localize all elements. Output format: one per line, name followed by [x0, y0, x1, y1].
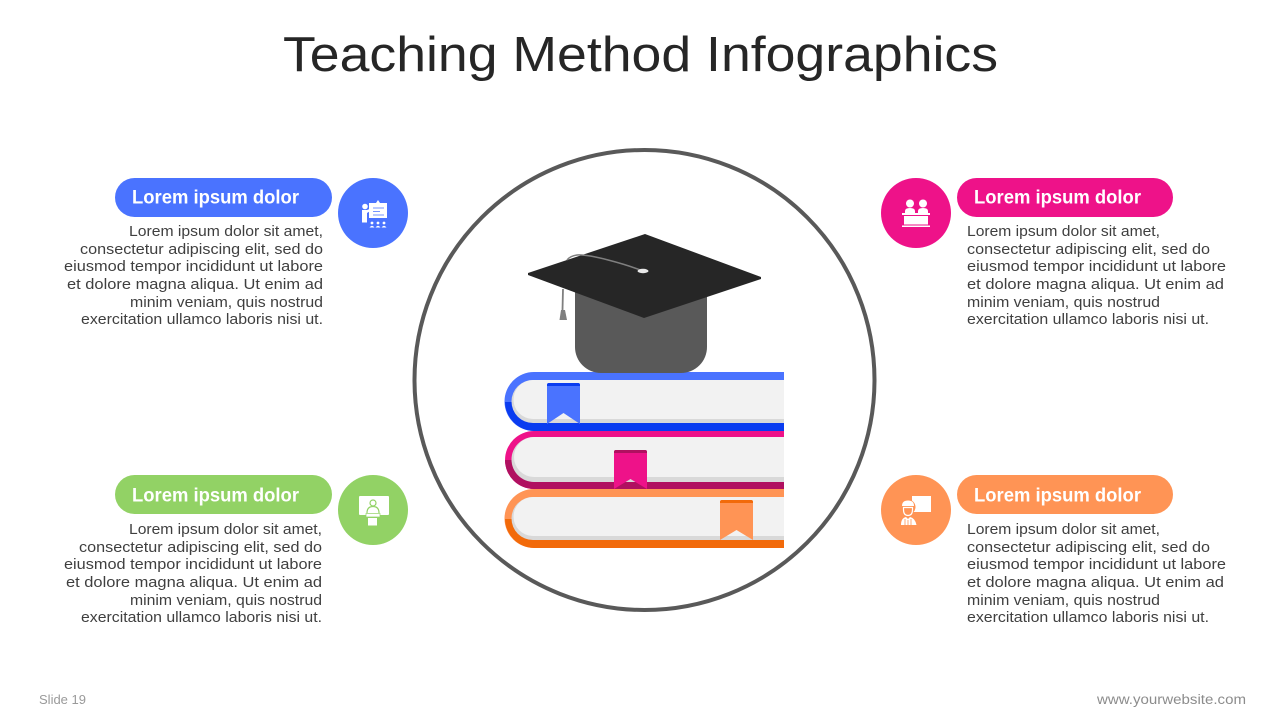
icon: presenter at board	[338, 178, 408, 248]
panel: top left	[64, 178, 408, 328]
text block: eiusmod tempor incididunt ut labore	[967, 556, 1226, 573]
bookmark: orange	[720, 500, 753, 540]
icon: speaker at podium	[338, 475, 408, 545]
cap board	[528, 234, 761, 318]
text block	[967, 521, 1226, 626]
icon: two people at desk	[881, 178, 951, 248]
panel: bottom left	[64, 475, 408, 626]
book: orange	[504, 489, 784, 548]
text block: minim veniam, quis nostrud	[130, 294, 323, 311]
text block: et dolore magna aliqua. Ut enim ad	[67, 276, 323, 293]
text block	[967, 223, 1226, 328]
text block: minim veniam, quis nostrud	[967, 294, 1160, 311]
heading pill: Lorem ipsum dolor	[132, 486, 300, 506]
footer: slide number: Slide 19	[39, 692, 86, 707]
text block: et dolore magna aliqua. Ut enim ad	[967, 276, 1224, 293]
text block: exercitation ullamco laboris nisi ut.	[967, 311, 1209, 328]
heading pill	[957, 475, 1173, 514]
book: blue	[504, 372, 784, 431]
panel: top right	[881, 178, 1226, 328]
heading pill: Lorem ipsum dolor	[974, 486, 1142, 506]
graduation cap	[528, 234, 761, 373]
text block: Lorem ipsum dolor sit amet,	[967, 223, 1160, 240]
tassel	[560, 255, 648, 320]
heading pill	[115, 178, 332, 217]
illustration: books and graduation cap	[504, 234, 784, 548]
title: Teaching Method Infographics	[283, 28, 998, 82]
panel: bottom right	[881, 475, 1226, 626]
bookmark: pink	[614, 450, 647, 489]
book: pink	[505, 431, 784, 489]
text block: Lorem ipsum dolor sit amet,	[129, 223, 323, 240]
text block: minim veniam, quis nostrud	[967, 592, 1160, 609]
text block: eiusmod tempor incididunt ut labore	[967, 258, 1226, 275]
text block: consectetur adipiscing elit, sed do	[967, 539, 1210, 556]
text block	[64, 223, 323, 328]
heading pill	[957, 178, 1173, 217]
text block: consectetur adipiscing elit, sed do	[79, 539, 322, 556]
text block: et dolore magna aliqua. Ut enim ad	[967, 574, 1224, 591]
text block: Lorem ipsum dolor sit amet,	[129, 521, 322, 538]
text block: et dolore magna aliqua. Ut enim ad	[66, 574, 322, 591]
text block: consectetur adipiscing elit, sed do	[967, 241, 1210, 258]
text block: consectetur adipiscing elit, sed do	[80, 241, 323, 258]
heading pill: Lorem ipsum dolor	[132, 188, 300, 208]
icon: teacher with speech board	[881, 475, 951, 545]
text block: eiusmod tempor incididunt ut labore	[64, 258, 323, 275]
bookmark: blue	[547, 383, 580, 424]
text block: exercitation ullamco laboris nisi ut.	[81, 311, 323, 328]
footer: website: www.yourwebsite.com	[1096, 692, 1246, 707]
text block: minim veniam, quis nostrud	[130, 592, 322, 609]
heading pill	[115, 475, 332, 514]
central circle outline	[414, 150, 874, 610]
cap base	[575, 285, 707, 373]
text block: Lorem ipsum dolor sit amet,	[967, 521, 1160, 538]
text block: eiusmod tempor incididunt ut labore	[64, 556, 322, 573]
text block: exercitation ullamco laboris nisi ut.	[81, 609, 322, 626]
text block	[64, 521, 322, 626]
heading pill: Lorem ipsum dolor	[974, 188, 1142, 208]
text block: exercitation ullamco laboris nisi ut.	[967, 609, 1209, 626]
